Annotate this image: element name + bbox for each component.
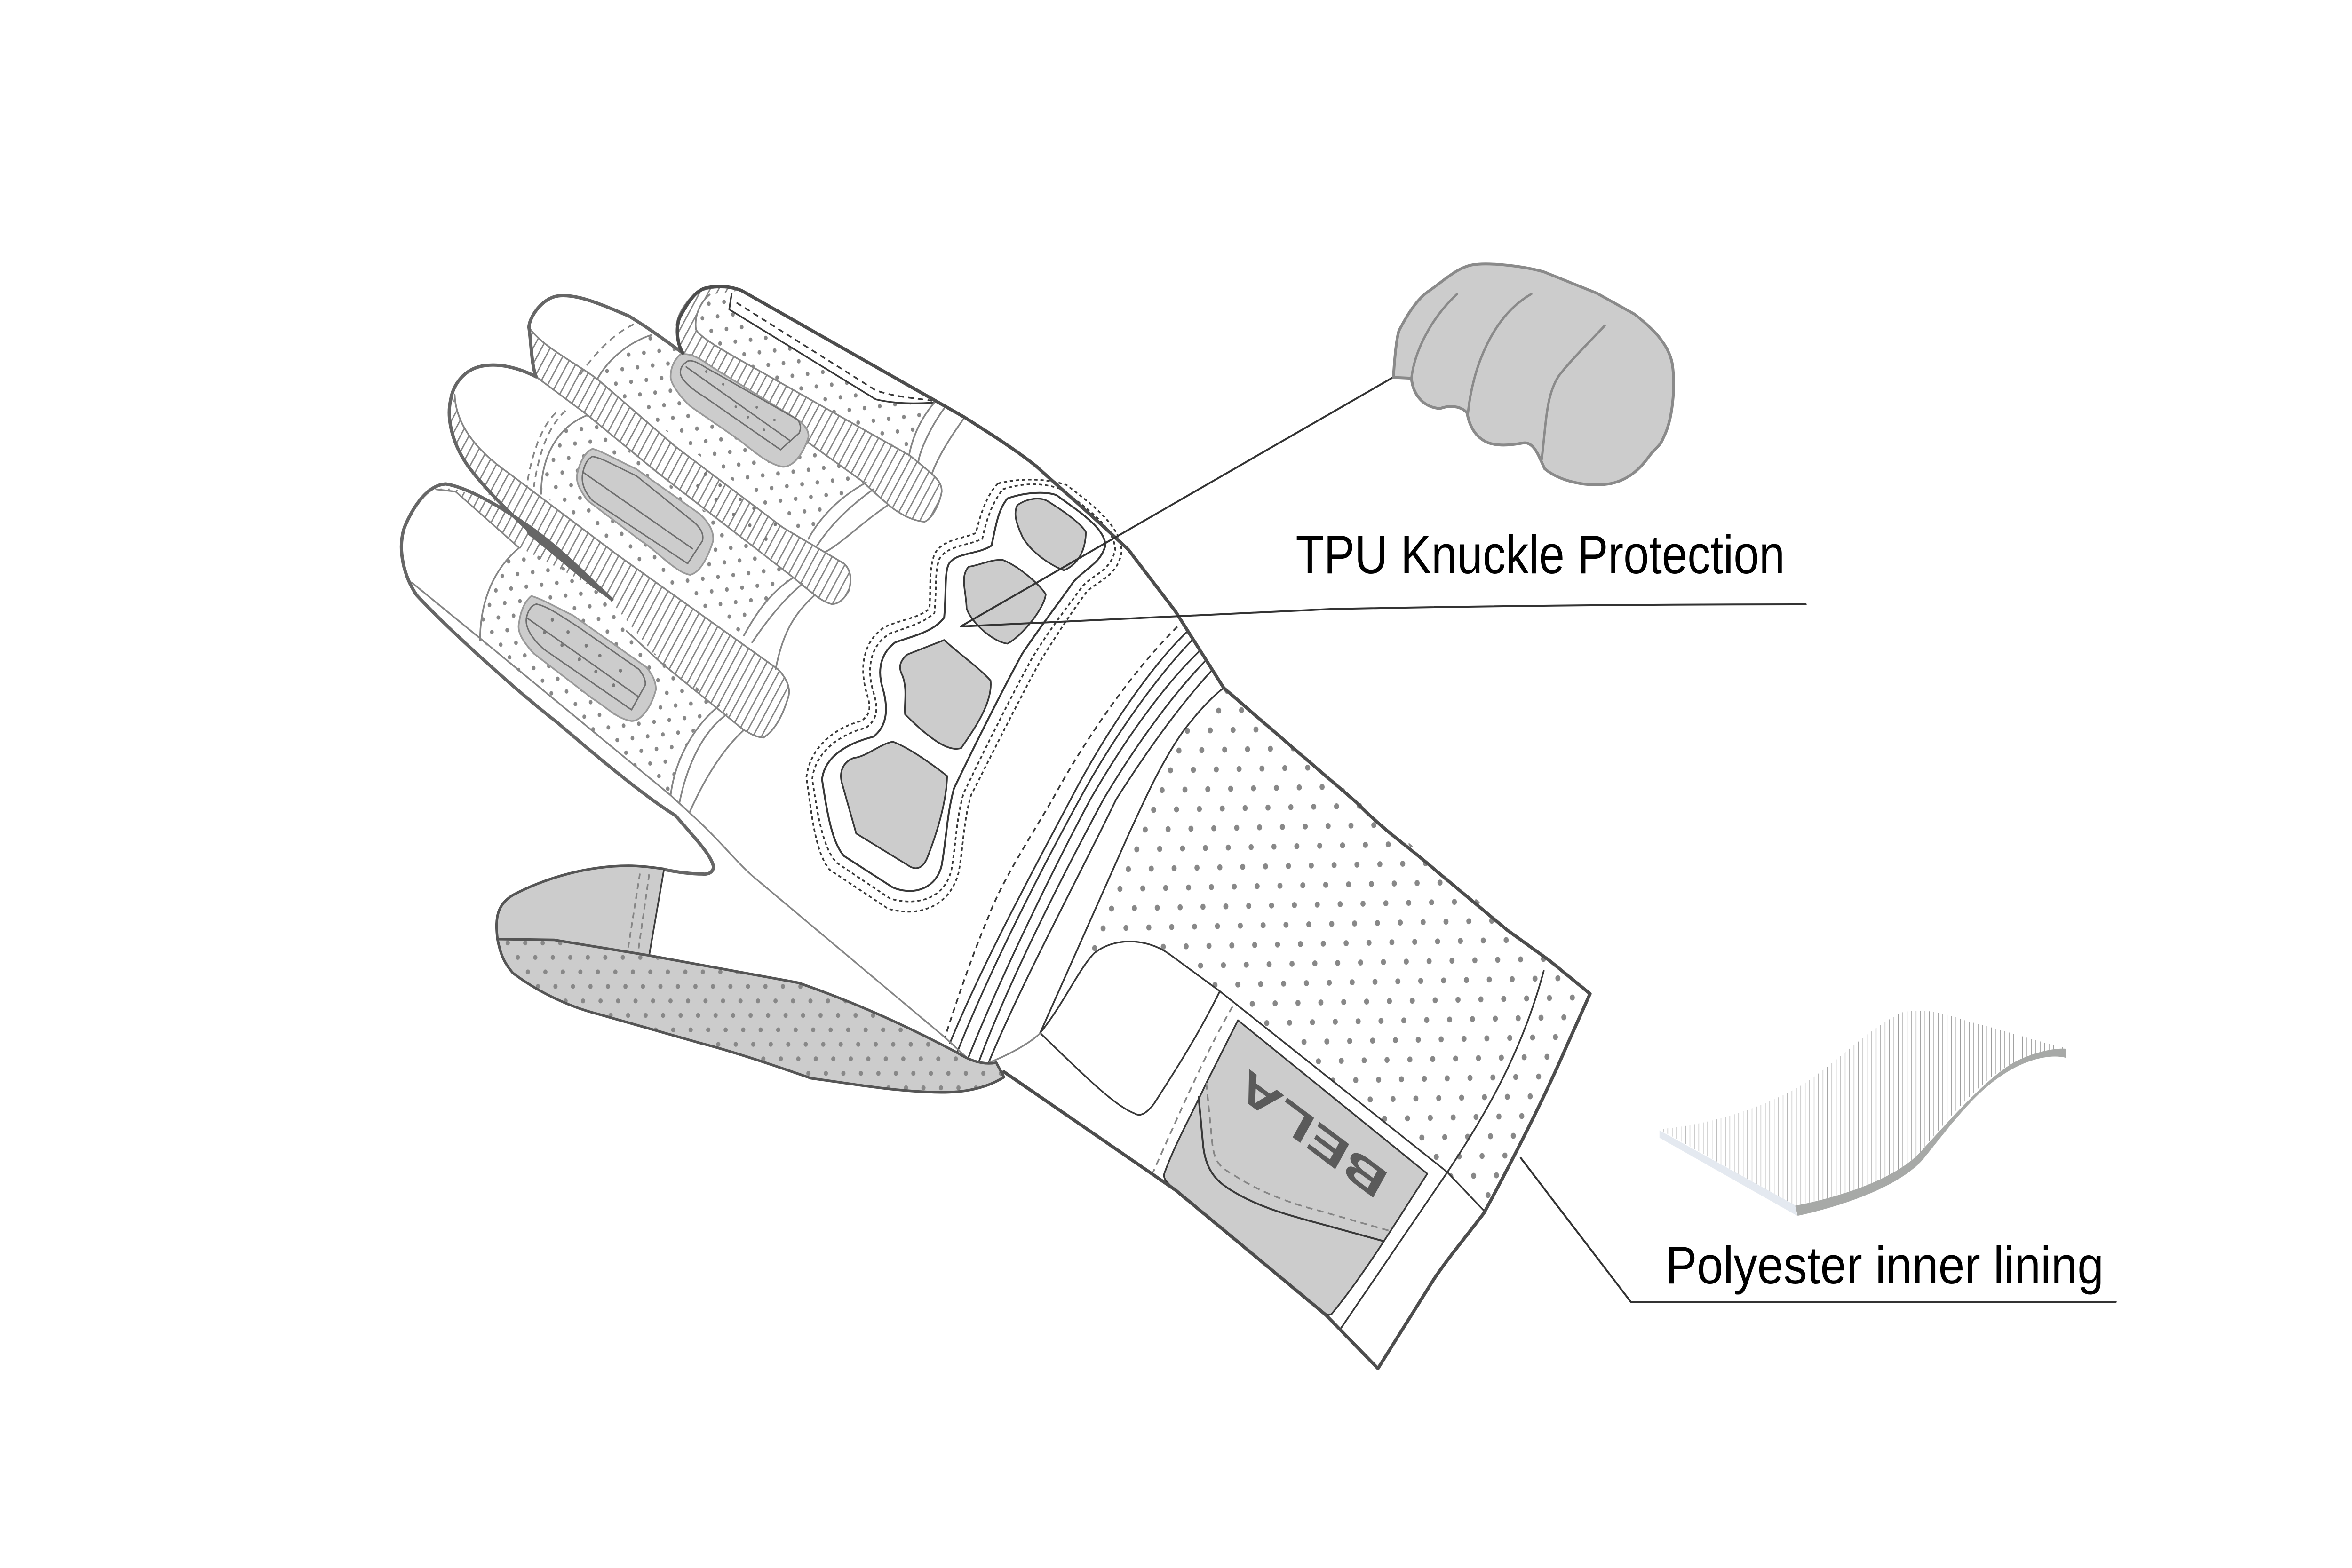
knuckle leader lines bbox=[961, 377, 1806, 626]
cuff perforation bbox=[1092, 690, 1575, 1198]
finger slit bbox=[524, 525, 612, 600]
icon: polyester fabric sheet bbox=[1660, 1011, 2066, 1216]
label: TPU Knuckle Protection: TPU Knuckle Protection bbox=[1296, 524, 1785, 585]
finger details bbox=[401, 286, 1129, 911]
thumb bbox=[497, 823, 1040, 1093]
glove features infographic bbox=[400, 262, 2117, 1370]
finger outline bbox=[401, 296, 714, 874]
glove illustration bbox=[400, 262, 1807, 1370]
pad B bbox=[577, 449, 713, 575]
cuff outline bbox=[1004, 550, 1590, 1369]
finger perforation bbox=[482, 300, 921, 791]
finger hatched bands bbox=[439, 288, 940, 736]
fabric edges bbox=[1660, 1049, 2066, 1216]
icon: knuckle guard bbox=[1393, 264, 1674, 485]
thumb perforation bbox=[505, 941, 1002, 1090]
logo: BELA bbox=[1230, 1060, 1395, 1208]
pad perforations bbox=[543, 370, 777, 687]
label: Polyester inner lining: Polyester inner lining bbox=[1665, 1236, 2104, 1295]
logo patch bbox=[1164, 1020, 1427, 1315]
knuckle guard seams bbox=[822, 493, 1105, 891]
knuckle pads bbox=[841, 499, 1086, 868]
pad C bbox=[518, 596, 656, 721]
back of hand outline bbox=[677, 286, 1129, 550]
fabric surface bbox=[1663, 1011, 2063, 1206]
closure tab bbox=[1040, 942, 1220, 1115]
pad A bbox=[671, 354, 809, 467]
lining leader line bbox=[1521, 1158, 2116, 1302]
wrist stripes and cuff seams bbox=[945, 550, 1590, 1369]
thumb outline bbox=[497, 866, 1004, 1093]
